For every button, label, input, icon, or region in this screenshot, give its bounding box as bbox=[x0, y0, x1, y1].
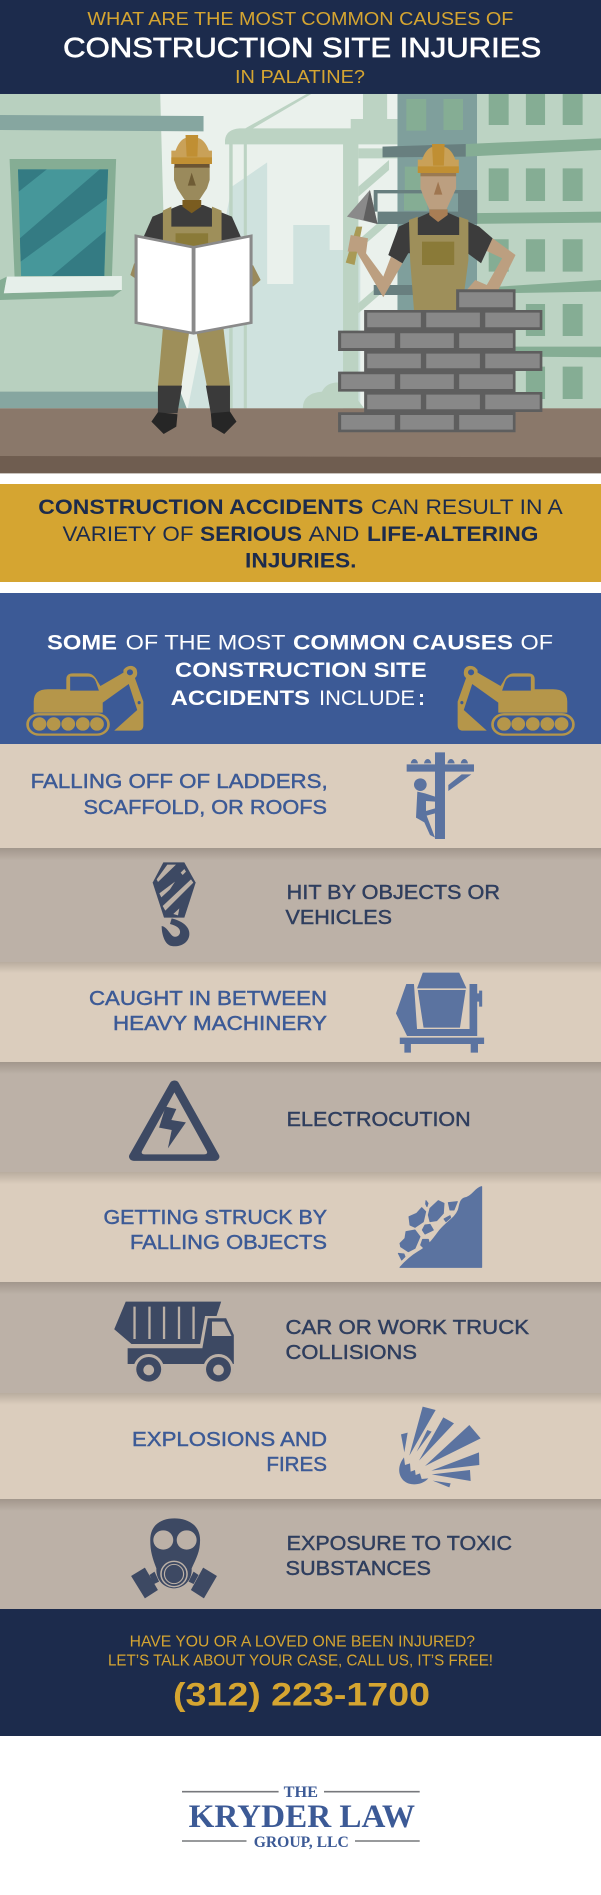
icon: high voltage warning triangle bbox=[134, 1085, 215, 1157]
icon: crane hook bbox=[153, 862, 196, 946]
row: car or work truck collisions bbox=[0, 1282, 601, 1393]
main title: CONSTRUCTION SITE INJURIES bbox=[63, 32, 541, 63]
intro line three: INCLUDE bbox=[319, 686, 415, 710]
logo: The Kryder Law Group bbox=[182, 1784, 420, 1851]
row: falling off of ladders bbox=[0, 744, 601, 848]
row text bbox=[286, 882, 500, 929]
header line one: WHAT ARE THE MOST COMMON CAUSES OF bbox=[87, 8, 513, 29]
row text bbox=[104, 1207, 327, 1254]
intro line one: SOME bbox=[47, 630, 117, 654]
statement line two: SERIOUS bbox=[200, 523, 302, 546]
logo: The Kryder Law Group: GROUP, LLC bbox=[254, 1834, 349, 1851]
statement line three: INJURIES. bbox=[245, 550, 356, 573]
call-to-action text: HAVE YOU OR A LOVED ONE BEEN INJURED? bbox=[130, 1634, 475, 1651]
row: hit by objects or vehicles bbox=[0, 848, 601, 962]
row text: CAUGHT IN BETWEEN bbox=[89, 988, 327, 1010]
intro line one: OF THE MOST bbox=[126, 630, 286, 654]
intro line three bbox=[171, 686, 425, 710]
call-to-action text: LET’S TALK ABOUT YOUR CASE, CALL US, IT’S FREE! bbox=[108, 1653, 493, 1670]
row text: HEAVY MACHINERY bbox=[113, 1013, 327, 1035]
row text: FALLING OFF OF LADDERS, bbox=[31, 771, 328, 793]
row text: SCAFFOLD, OR ROOFS bbox=[84, 797, 327, 819]
row: electrocution bbox=[0, 1062, 601, 1172]
right worker with trowel bbox=[346, 144, 516, 310]
intro line one: COMMON CAUSES bbox=[293, 630, 513, 654]
statement line two: VARIETY OF bbox=[62, 523, 194, 546]
statement line one: CAN RESULT IN A bbox=[371, 496, 563, 519]
row: caught in between heavy machinery bbox=[0, 962, 601, 1062]
logo: The Kryder Law Group: THE bbox=[284, 1784, 318, 1801]
row text: FALLING OBJECTS bbox=[130, 1232, 327, 1254]
blue intro panel bbox=[0, 593, 601, 744]
left building bbox=[0, 94, 204, 408]
icon: excavator left bbox=[28, 666, 143, 735]
call-to-action panel bbox=[0, 1609, 601, 1736]
header panel bbox=[0, 0, 601, 94]
icon: dump truck bbox=[114, 1302, 234, 1385]
illustration: construction site with two workers bbox=[0, 94, 601, 473]
statement line two: LIFE-ALTERING bbox=[367, 523, 538, 546]
logo: The Kryder Law Group: KRYDER LAW bbox=[189, 1799, 415, 1835]
row text: EXPOSURE TO TOXIC bbox=[287, 1533, 512, 1555]
statement line two: AND bbox=[308, 523, 360, 546]
icon: gas mask bbox=[131, 1518, 217, 1598]
brick wall bbox=[338, 289, 542, 432]
intro line one: OF bbox=[520, 630, 553, 654]
intro line three: : bbox=[418, 686, 425, 710]
row text: HIT BY OBJECTS OR bbox=[287, 882, 500, 904]
row text: GETTING STRUCK BY bbox=[104, 1207, 327, 1229]
icon: rocks falling down slope bbox=[398, 1187, 482, 1267]
row text bbox=[132, 1429, 327, 1476]
header line three: IN PALATINE? bbox=[235, 66, 365, 87]
row text: COLLISIONS bbox=[286, 1342, 417, 1364]
icon: concrete mixer bbox=[396, 973, 484, 1053]
left worker reading plans bbox=[130, 135, 261, 434]
intro line three: ACCIDENTS bbox=[171, 686, 310, 710]
call-to-action text bbox=[108, 1634, 493, 1670]
row text: FIRES bbox=[266, 1454, 327, 1476]
icon: excavator right bbox=[458, 666, 573, 735]
icon: worker climbing utility pole bbox=[407, 752, 474, 839]
statement line one: CONSTRUCTION ACCIDENTS bbox=[38, 496, 363, 519]
row text: ELECTROCUTION bbox=[287, 1109, 471, 1131]
statement line one bbox=[38, 496, 563, 519]
phone number: (312) 223-1700 bbox=[173, 1677, 430, 1713]
row text bbox=[31, 771, 328, 819]
row: explosions and fires bbox=[0, 1393, 601, 1499]
row text: SUBSTANCES bbox=[286, 1558, 431, 1580]
row text: CAR OR WORK TRUCK bbox=[286, 1317, 530, 1339]
row text bbox=[286, 1317, 530, 1364]
gold statement panel bbox=[0, 484, 601, 582]
statement line two bbox=[62, 523, 538, 546]
row: getting struck by falling objects bbox=[0, 1172, 601, 1282]
row text bbox=[286, 1533, 512, 1580]
row text: EXPLOSIONS AND bbox=[132, 1429, 327, 1451]
intro line two: CONSTRUCTION SITE bbox=[175, 658, 427, 682]
row text bbox=[89, 988, 327, 1035]
intro line one bbox=[47, 630, 553, 654]
row text: VEHICLES bbox=[286, 907, 392, 929]
ground bbox=[0, 408, 601, 473]
row: exposure to toxic substances bbox=[0, 1499, 601, 1609]
icon: explosion bbox=[399, 1407, 481, 1487]
